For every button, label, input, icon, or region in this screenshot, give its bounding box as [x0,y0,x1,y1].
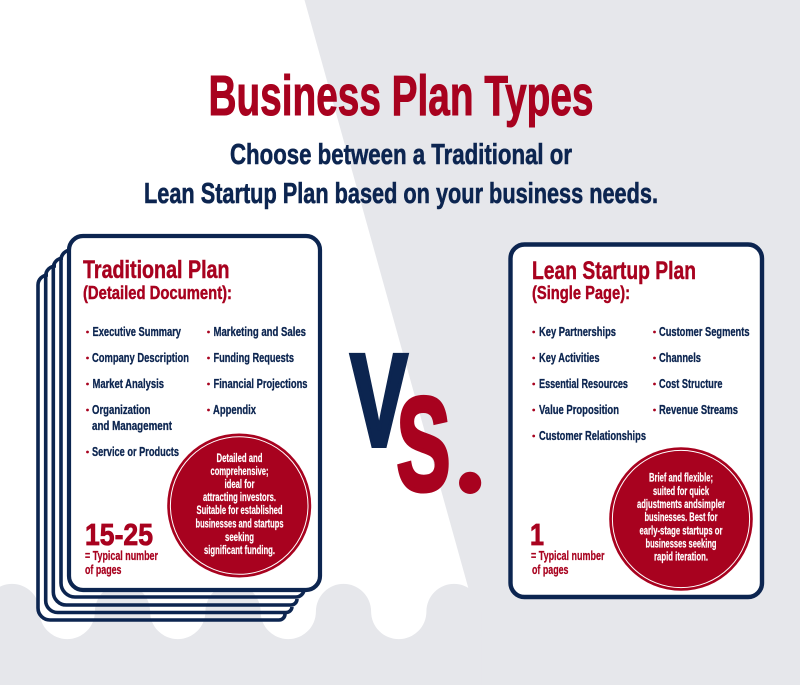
callout: lean summary: early-stage startups or [640,526,723,538]
title: Business Plan Types [208,64,594,128]
traditional list: left column: Executive Summary [92,324,182,339]
page count: 15-25: of pages [85,562,122,577]
panel: lean startup plan [510,244,762,597]
lean heading: (Single Page): [532,282,630,303]
callout: lean summary: businesses. Best for [644,512,718,524]
callout: traditional summary: attracting investors. [203,492,276,504]
page count: 15-25: = Typical number [85,548,158,563]
page count: 1: of pages [532,562,568,577]
versus mark [350,326,487,522]
lean page [510,244,762,597]
callout: lean summary: businesses seeking [646,538,716,550]
lean list: left column: Value Proposition [539,402,619,417]
page count: 1 [530,517,604,577]
panel: traditional plan [38,236,320,620]
traditional list: right column: Funding Requests [214,350,294,365]
versus mark: S [396,371,450,519]
lean list: right column: Revenue Streams [659,402,738,417]
lean heading: Lean Startup Plan [532,257,696,285]
stacked back pages [38,250,304,620]
traditional list: left column: Organization [92,402,151,417]
traditional list: left column: Market Analysis [92,376,164,391]
lean list: left column: Essential Resources [539,376,628,391]
lean list: left column: Customer Relationships [539,428,646,443]
callout: lean summary: adjustments andsimpler [637,499,725,511]
lean list: right column: Channels [659,350,701,365]
versus mark: . [453,370,487,522]
traditional heading [83,256,232,303]
traditional heading: Traditional Plan [83,256,230,284]
traditional list: left column: and Management [92,418,173,433]
traditional list: right column: Marketing and Sales [214,324,306,339]
callout: traditional summary [167,434,311,578]
traditional list: right column [207,324,308,417]
traditional list: left column: Service or Products [92,444,179,459]
callout: lean summary: suited for quick [653,486,709,498]
callout: traditional summary: comprehensive; [210,466,268,478]
lean list: right column: Customer Segments [659,324,750,339]
traditional heading: (Detailed Document): [83,282,232,303]
page count: 15-25 [85,517,158,577]
callout: lean summary [609,447,753,591]
lean list: right column: Cost Structure [659,376,722,391]
subtitle: Choose between a Traditional or [230,139,572,171]
callout: traditional summary: businesses and startups [196,518,284,530]
lean list: left column [532,324,646,443]
lean list: left column: Key Activities [539,350,600,365]
callout: traditional summary: Detailed and [216,453,262,465]
callout: traditional summary: Suitable for established [196,505,282,517]
callout: lean summary: Brief and flexible; [649,472,713,484]
traditional list: left column: Company Description [92,350,189,365]
front page [69,236,320,590]
page count: 1: = Typical number [531,548,604,563]
subtitle [144,139,658,210]
lean list: left column: Key Partnerships [539,324,616,339]
lean heading [532,257,696,303]
callout: traditional summary: significant funding. [204,545,275,557]
page count: 15-25: 15-25 [85,517,153,552]
traditional list: right column: Financial Projections [214,376,308,391]
versus mark: V [350,326,408,474]
callout: traditional summary: seeking [225,532,254,544]
lean list: right column [653,324,750,417]
traditional list: right column: Appendix [213,402,257,417]
page count: 1: 1 [530,517,544,552]
callout: traditional summary: ideal for [224,479,255,491]
callout: lean summary: rapid iteration. [654,552,708,564]
traditional list: left column [86,324,189,459]
